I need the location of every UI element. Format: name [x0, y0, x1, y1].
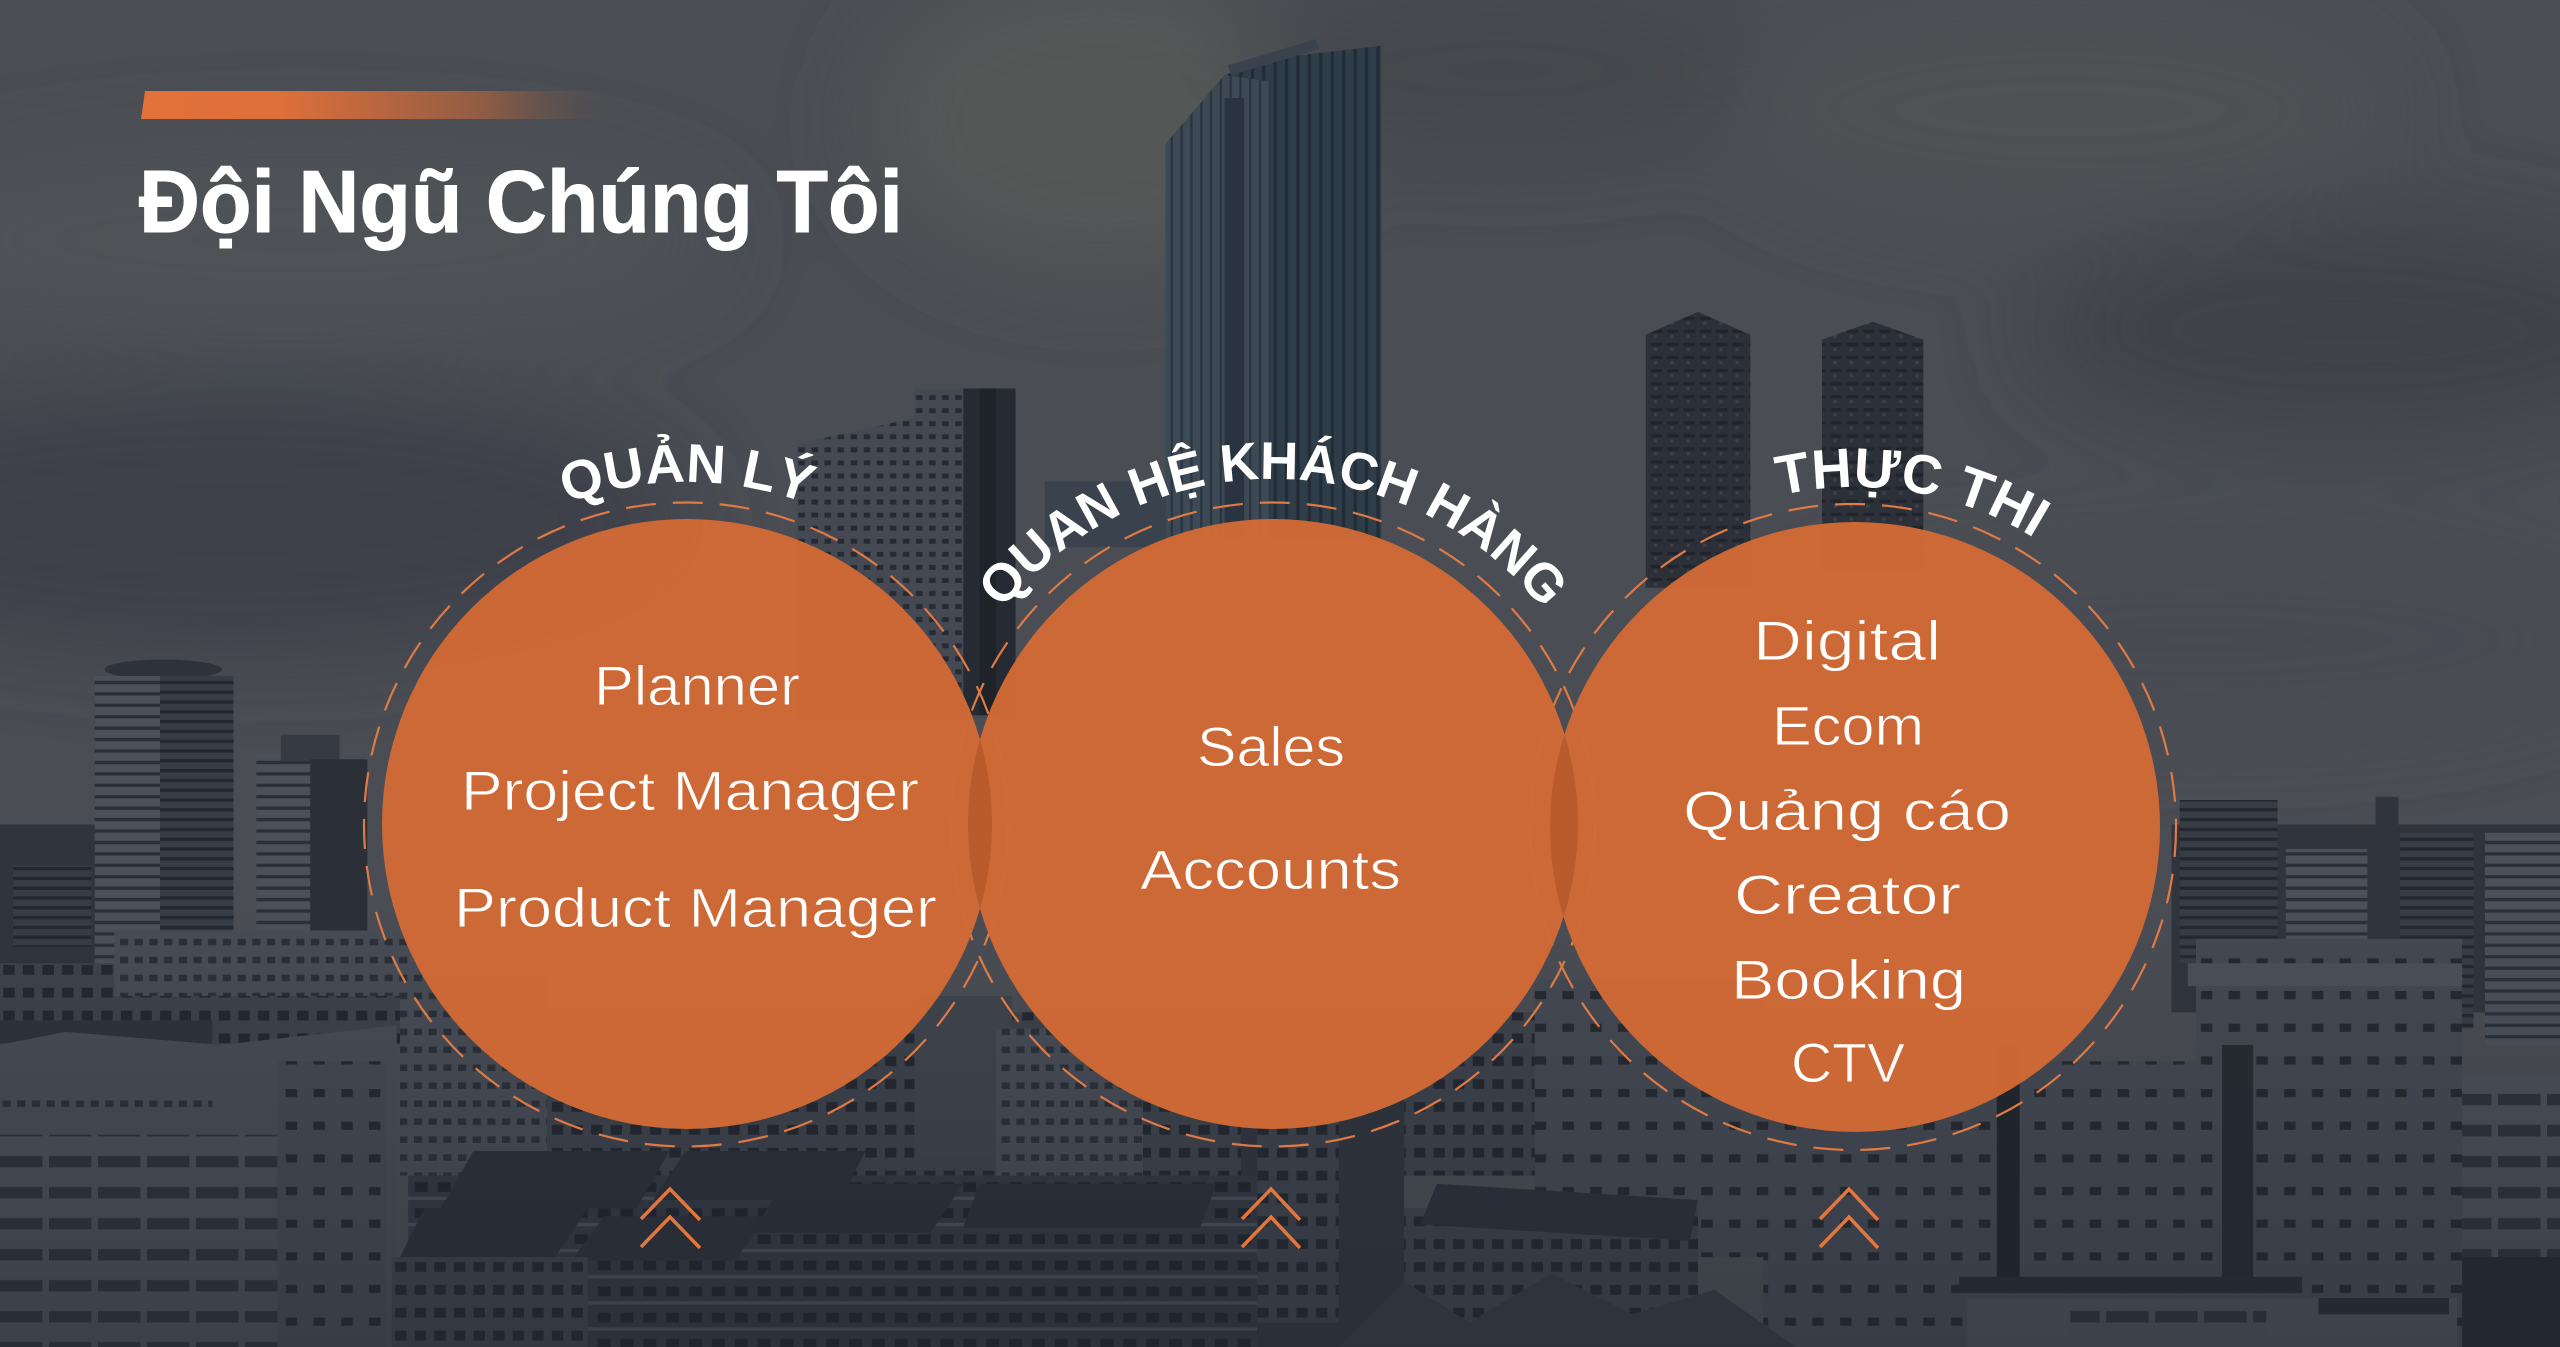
- curved label: THỰC THI: [1773, 448, 2051, 536]
- curved label: QUẢN LÝ: [562, 434, 818, 506]
- chevrons up: [1820, 1189, 1878, 1248]
- mid city band left: [0, 963, 408, 1045]
- roles list: [1140, 715, 1401, 901]
- roles list: Accounts: [1140, 838, 1401, 901]
- roles list: Creator: [1734, 863, 1961, 926]
- roles list: CTV: [1791, 1031, 1906, 1094]
- roles list: [1683, 609, 2011, 1094]
- low rise roofs: [408, 1176, 1257, 1347]
- far right block: [2462, 1078, 2560, 1274]
- large right building: [2025, 1061, 2196, 1347]
- central mid-rise block: [1535, 980, 1763, 1257]
- roles list: Digital: [1753, 609, 1941, 672]
- mid-left tower: [256, 754, 330, 934]
- circle: [968, 519, 1578, 1129]
- title: Đội Ngũ Chúng Tôi: [139, 152, 903, 251]
- circle: [382, 519, 992, 1129]
- chevrons up: [1242, 1189, 1300, 1248]
- distant right skyline: [2171, 825, 2560, 1012]
- chevrons up: [641, 1189, 700, 1248]
- dashed rings: [364, 502, 2176, 1150]
- roles list: [454, 654, 937, 939]
- roles list: Booking: [1731, 948, 1966, 1011]
- roles list: Sales: [1197, 715, 1345, 778]
- circle: [1550, 522, 2160, 1132]
- twin towers: [1646, 312, 1750, 588]
- buildings under first and second circle: [400, 963, 547, 1176]
- roles list: Ecom: [1772, 694, 1924, 757]
- overlap lens right: [1550, 734, 1578, 917]
- overlap lens left: [968, 739, 992, 909]
- building behind first circle: [797, 389, 1016, 718]
- roles list: Project Manager: [461, 759, 919, 822]
- panel: thực thi: [1550, 448, 2160, 1250]
- low building far right bottom: [1967, 1298, 2457, 1347]
- panel: quản lý: [382, 434, 980, 1250]
- far left small towers: [0, 825, 98, 988]
- roles list: Planner: [594, 654, 800, 717]
- left tower: [104, 660, 222, 679]
- bottom-left white building: [0, 1025, 397, 1347]
- accent bar: [141, 91, 620, 119]
- roles list: Quảng cáo: [1683, 779, 2011, 842]
- panel: quan hệ khách hàng: [968, 436, 1564, 1250]
- roles list: Product Manager: [454, 876, 937, 939]
- curved label: QUAN HỆ KHÁCH HÀNG: [982, 436, 1564, 603]
- main tall tower: [1166, 46, 1381, 539]
